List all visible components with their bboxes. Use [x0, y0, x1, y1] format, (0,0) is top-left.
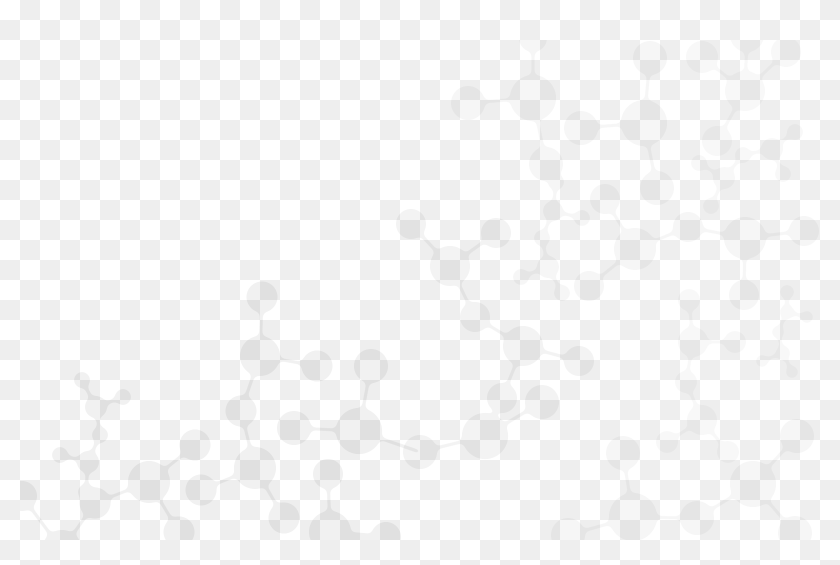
molecule: centre right [574, 184, 819, 310]
molecule: top right [686, 18, 801, 156]
molecule: right middle [656, 289, 746, 463]
molecule: lower right [551, 419, 814, 552]
molecule: upper right small cluster [691, 124, 803, 214]
molecule: lower centre [277, 349, 418, 540]
molecule: lower centre-left [186, 282, 332, 534]
molecule: upper centre [564, 41, 674, 205]
molecule: lower left small cluster [20, 372, 210, 540]
molecule: right tiny cluster [756, 285, 813, 378]
molecule: upper centre small chain [451, 24, 590, 301]
molecule: centre chain [396, 209, 594, 469]
